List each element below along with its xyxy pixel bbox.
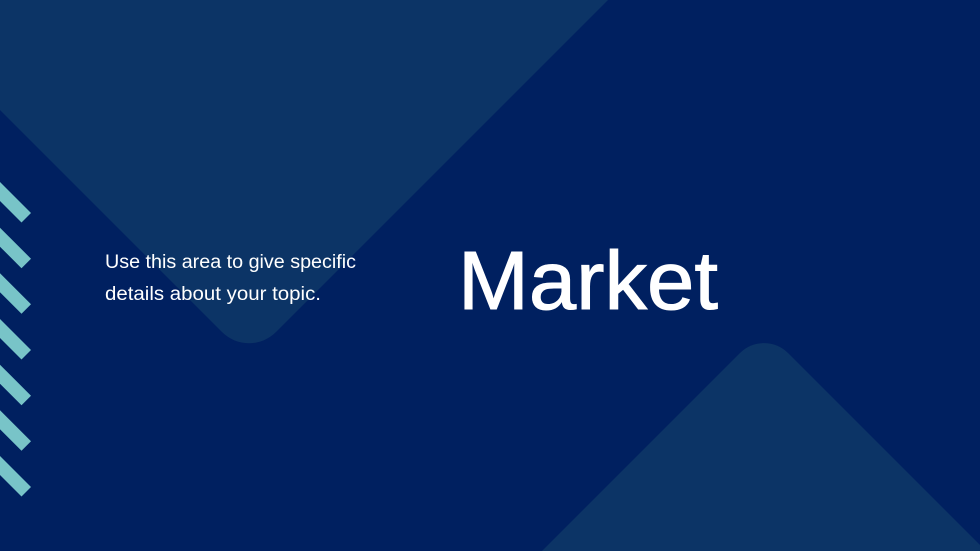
description text: [105, 252, 356, 305]
description text: details about your topic.: [105, 284, 321, 305]
title: Market: [458, 234, 718, 327]
teal diagonal stripes: [0, 182, 31, 496]
description text: Use this area to give specific: [105, 252, 356, 273]
bottom-right rounded triangle shape: [542, 343, 980, 551]
top-left rounded triangle shape: [0, 0, 608, 343]
